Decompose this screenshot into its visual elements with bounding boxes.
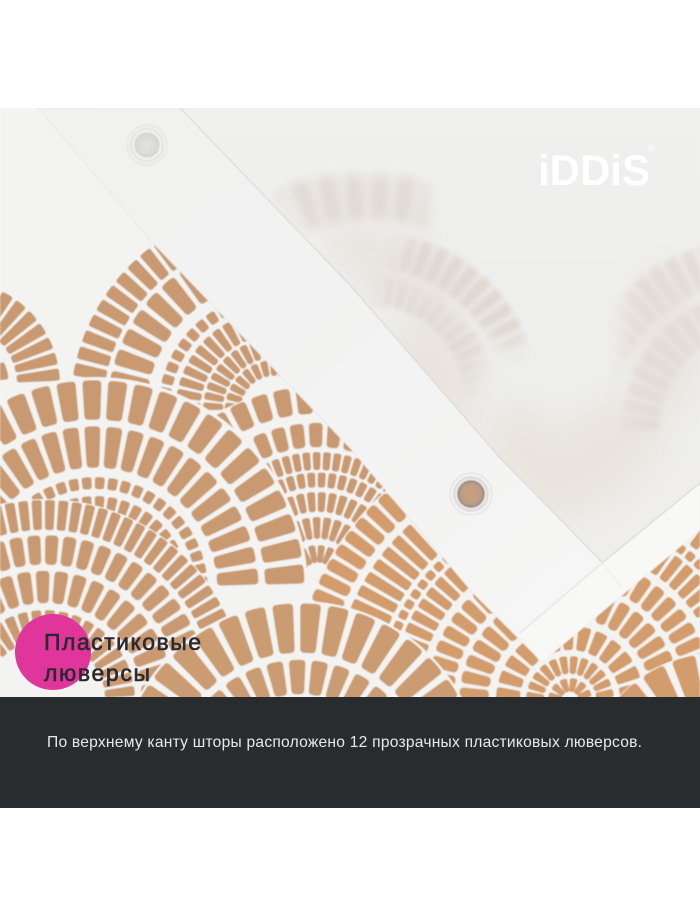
pattern fan: centre small apex [216, 388, 386, 568]
hem seams and shadows [180, 108, 700, 633]
ghost pattern: soft blotches [338, 230, 694, 514]
lower hem strip [520, 483, 700, 662]
photo: curtain corner with petal pattern [0, 108, 700, 697]
logo: IDDIS: iDDiS [538, 147, 650, 195]
callout: pink circle heading [15, 614, 209, 690]
heading: plastic grommets: люверсы [44, 660, 150, 686]
ghost pattern: right fan petals [623, 249, 700, 428]
logo: IDDIS: ® [648, 143, 655, 153]
pattern fan: left large [0, 377, 308, 590]
pattern fan: bottom right corner [618, 653, 700, 697]
caption text: По верхнему канту шторы расположено 12 прозрачных пластиковых люверсов. [47, 734, 642, 751]
fabric background [0, 108, 318, 616]
pattern fan: bottom left [0, 499, 246, 700]
heading: plastic grommets: Пластиковые [44, 629, 201, 655]
ghost pattern: top blurred petals [279, 172, 430, 230]
ghost pattern: inner petals [382, 282, 482, 372]
pattern fan: bottom centre [140, 601, 462, 697]
sheer panel: translucent curtain with ghost pattern [274, 170, 700, 560]
pattern fan: lower right large [312, 490, 700, 697]
dark caption band [0, 697, 700, 808]
icon: lower transparent grommet [450, 473, 492, 515]
pattern fan: upper centre [72, 244, 280, 411]
hem: white folded band of the curtain [38, 108, 700, 662]
ghost pattern: sharper outer petals [400, 238, 524, 350]
pattern fan: far left [0, 292, 60, 383]
icon: upper transparent grommet [127, 125, 167, 165]
pink circle [15, 614, 91, 690]
